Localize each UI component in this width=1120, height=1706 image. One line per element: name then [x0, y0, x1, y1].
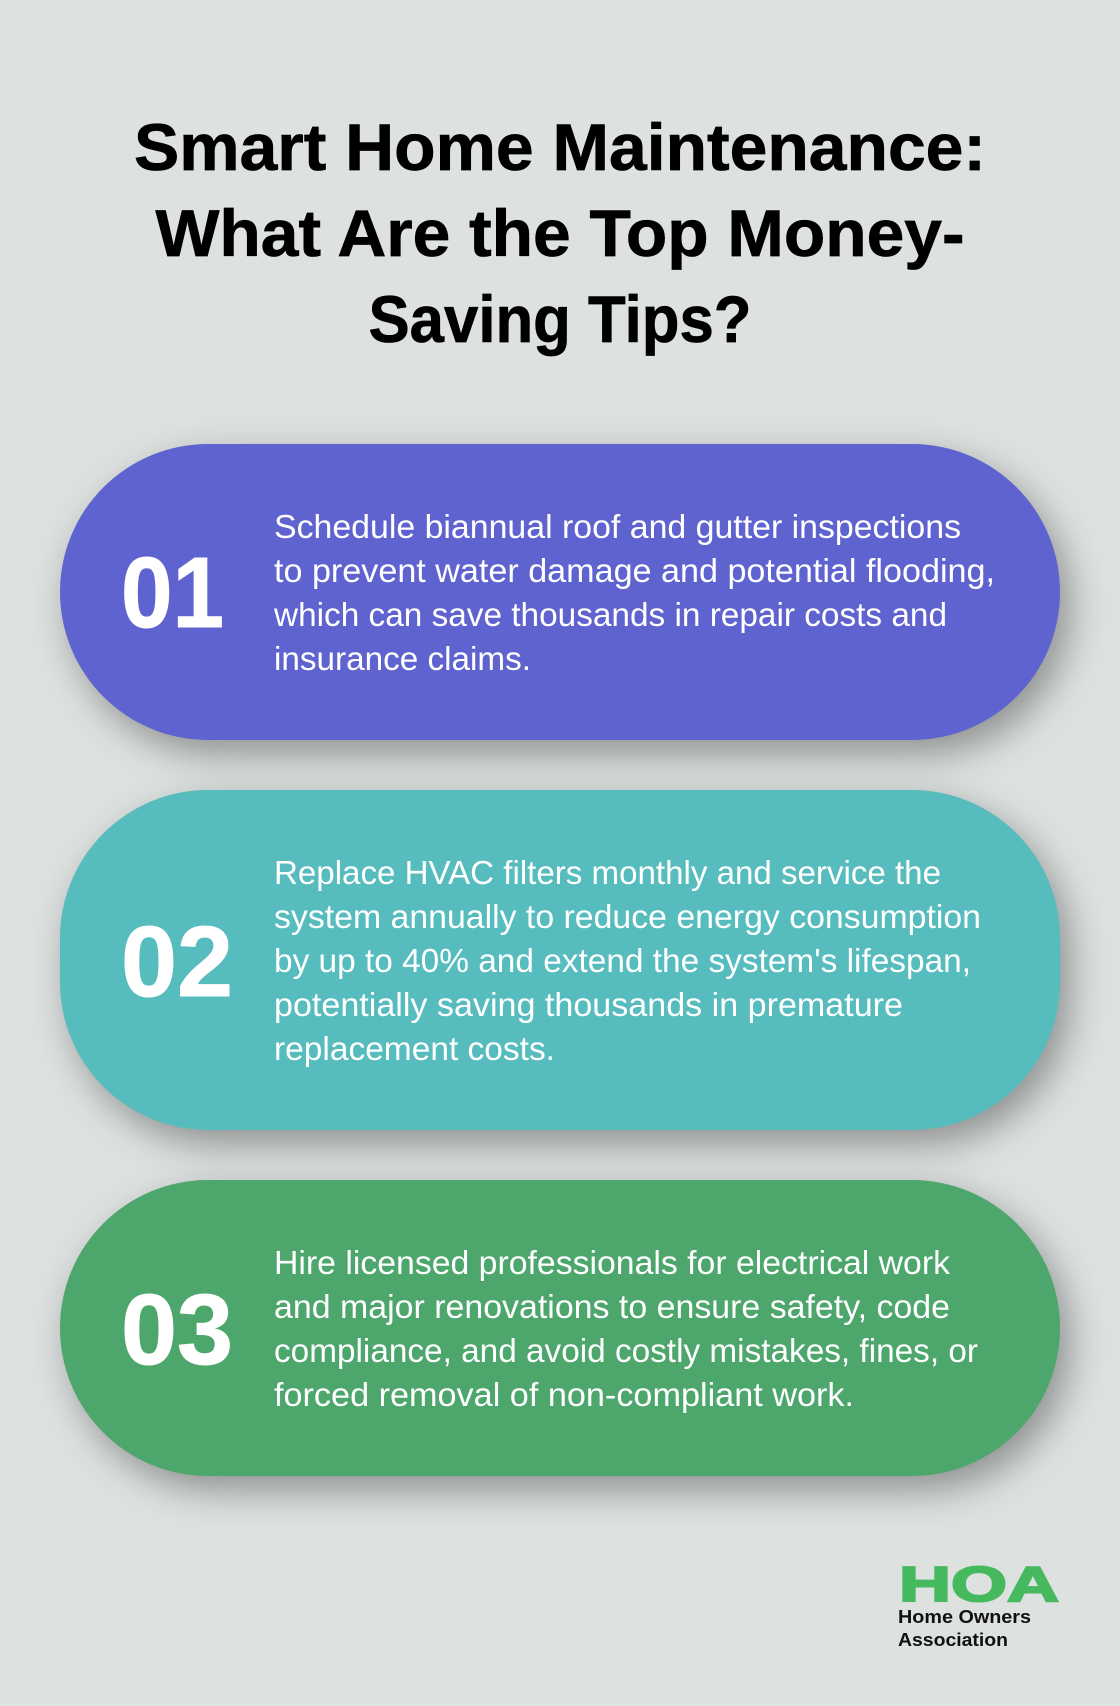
- tip 01 text: [273, 508, 995, 677]
- logo: HOA Home Owners Association: [898, 1558, 1059, 1650]
- tip 01 text: insurance claims.: [274, 640, 531, 677]
- panel: tip 03: [60, 1180, 1070, 1490]
- number 03: 03: [121, 1274, 233, 1386]
- panel: tip 02: [60, 790, 1070, 1144]
- tip 01 text: to prevent water damage and potential flooding,: [274, 552, 995, 589]
- tip 03 text: Hire licensed professionals for electrical work: [274, 1244, 951, 1281]
- title: Saving Tips?: [368, 282, 752, 356]
- tip 02 text: by up to 40% and extend the system's lifespan,: [274, 942, 971, 979]
- title: [134, 110, 986, 356]
- number 01: 01: [121, 537, 224, 649]
- tip 01 text: which can save thousands in repair costs and: [273, 596, 947, 633]
- logo: HOA Home Owners Association: HOA: [899, 1558, 1059, 1612]
- panel: tip 01: [60, 444, 1070, 754]
- logo: HOA Home Owners Association: Association: [898, 1630, 1008, 1650]
- tip 03 text: compliance, and avoid costly mistakes, fines, or: [274, 1332, 978, 1369]
- tip 02 text: replacement costs.: [274, 1030, 555, 1067]
- tip 02 text: potentially saving thousands in premature: [274, 986, 903, 1023]
- tip 03 text: [274, 1244, 978, 1413]
- tip 03 text: and major renovations to ensure safety, code: [274, 1288, 950, 1325]
- number 02: 02: [121, 906, 233, 1018]
- tip 02 text: [274, 854, 981, 1067]
- tip 02 text: system annually to reduce energy consumption: [274, 898, 981, 935]
- title: Smart Home Maintenance:: [134, 110, 986, 184]
- tip 01 text: Schedule biannual roof and gutter inspections: [274, 508, 961, 545]
- logo: HOA Home Owners Association: Home Owners: [898, 1607, 1031, 1627]
- tip 02 text: Replace HVAC filters monthly and service the: [274, 854, 941, 891]
- title: What Are the Top Money-: [156, 196, 964, 270]
- tip 03 text: forced removal of non-compliant work.: [274, 1376, 854, 1413]
